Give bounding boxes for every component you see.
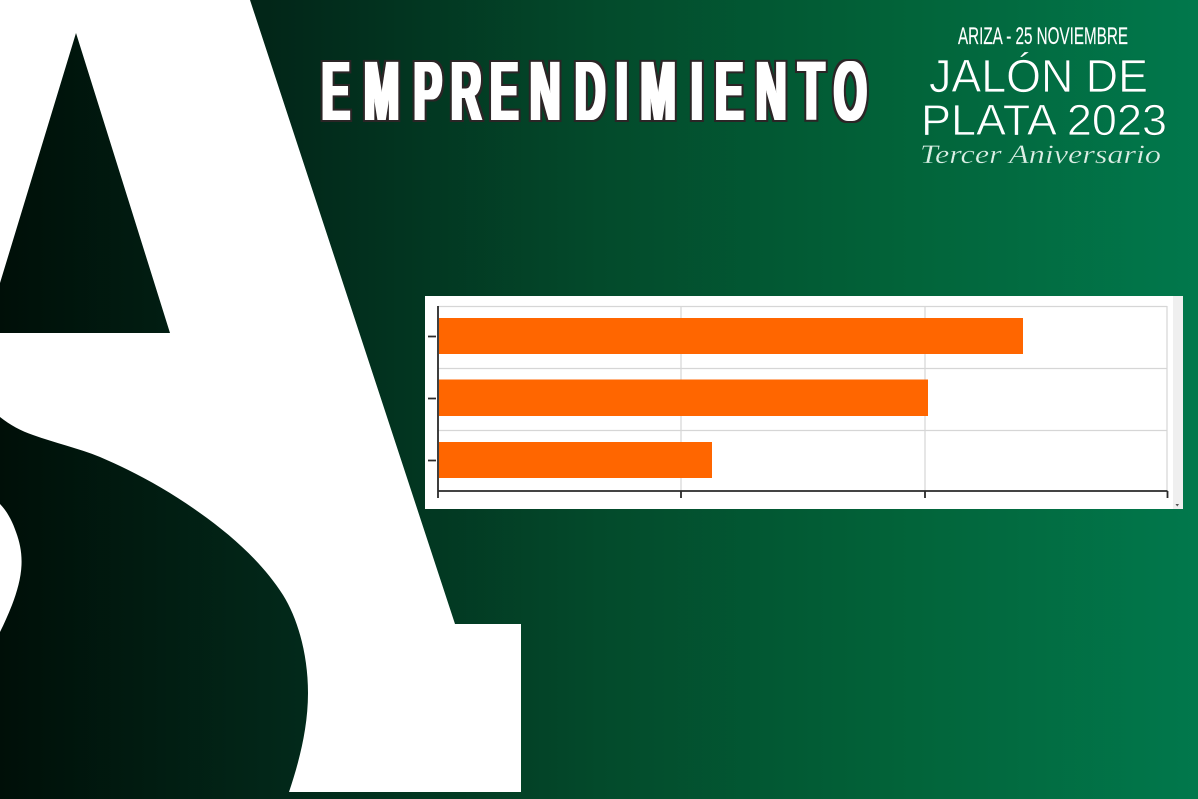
event name line 1: JALÓN DE <box>929 50 1148 102</box>
gridlines <box>438 306 1167 491</box>
bar 3 <box>439 442 712 478</box>
scroll arrow <box>1176 504 1179 506</box>
bar chart panel <box>425 296 1183 509</box>
event name line 2: PLATA 2023 <box>921 96 1167 145</box>
anniversary script: Tercer Aniversario <box>920 140 1161 169</box>
axes and ticks <box>428 306 1168 498</box>
event logo <box>920 23 1167 169</box>
panel background <box>425 296 1183 509</box>
scroll strip <box>1173 296 1183 509</box>
large white letter logo <box>0 0 521 792</box>
bar 1 <box>439 318 1023 354</box>
bars <box>439 318 1023 478</box>
title: EMPRENDIMIENTO <box>322 45 867 139</box>
bar 2 <box>439 380 928 416</box>
